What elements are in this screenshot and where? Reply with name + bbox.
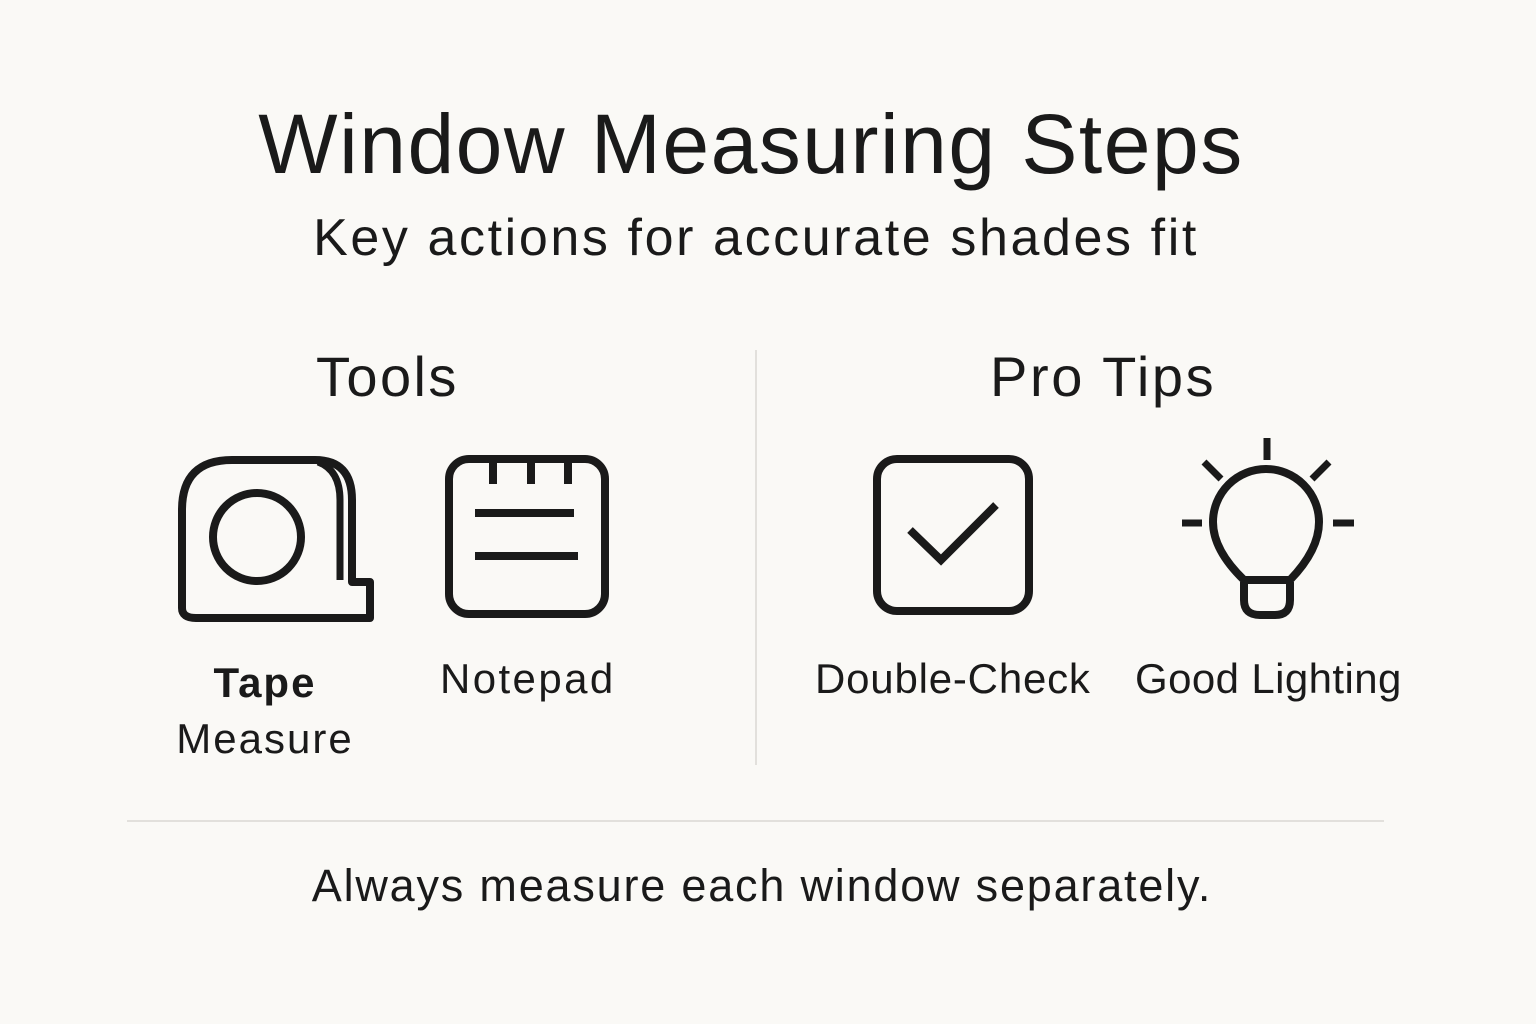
heading: tools: Tools — [316, 345, 459, 408]
horizontal divider — [127, 820, 1384, 822]
icon: tape measure — [178, 456, 374, 622]
label: notepad: Notepad — [440, 655, 616, 702]
title: Window Measuring Steps — [258, 97, 1244, 191]
icon: checkbox — [873, 455, 1033, 615]
label: double-check: Double-Check — [815, 655, 1091, 702]
vertical divider — [755, 350, 757, 765]
icon: light bulb — [1182, 438, 1354, 619]
label: good lighting: Good Lighting — [1135, 655, 1402, 702]
label: tape measure: Tape — [214, 659, 316, 706]
label: tape measure — [176, 659, 354, 762]
label: tape measure: Measure — [176, 715, 354, 762]
icon: notepad — [445, 455, 609, 618]
heading: pro tips: Pro Tips — [990, 345, 1216, 408]
footer note: Always measure each window separately. — [312, 860, 1212, 911]
subtitle: Key actions for accurate shades fit — [313, 209, 1199, 267]
